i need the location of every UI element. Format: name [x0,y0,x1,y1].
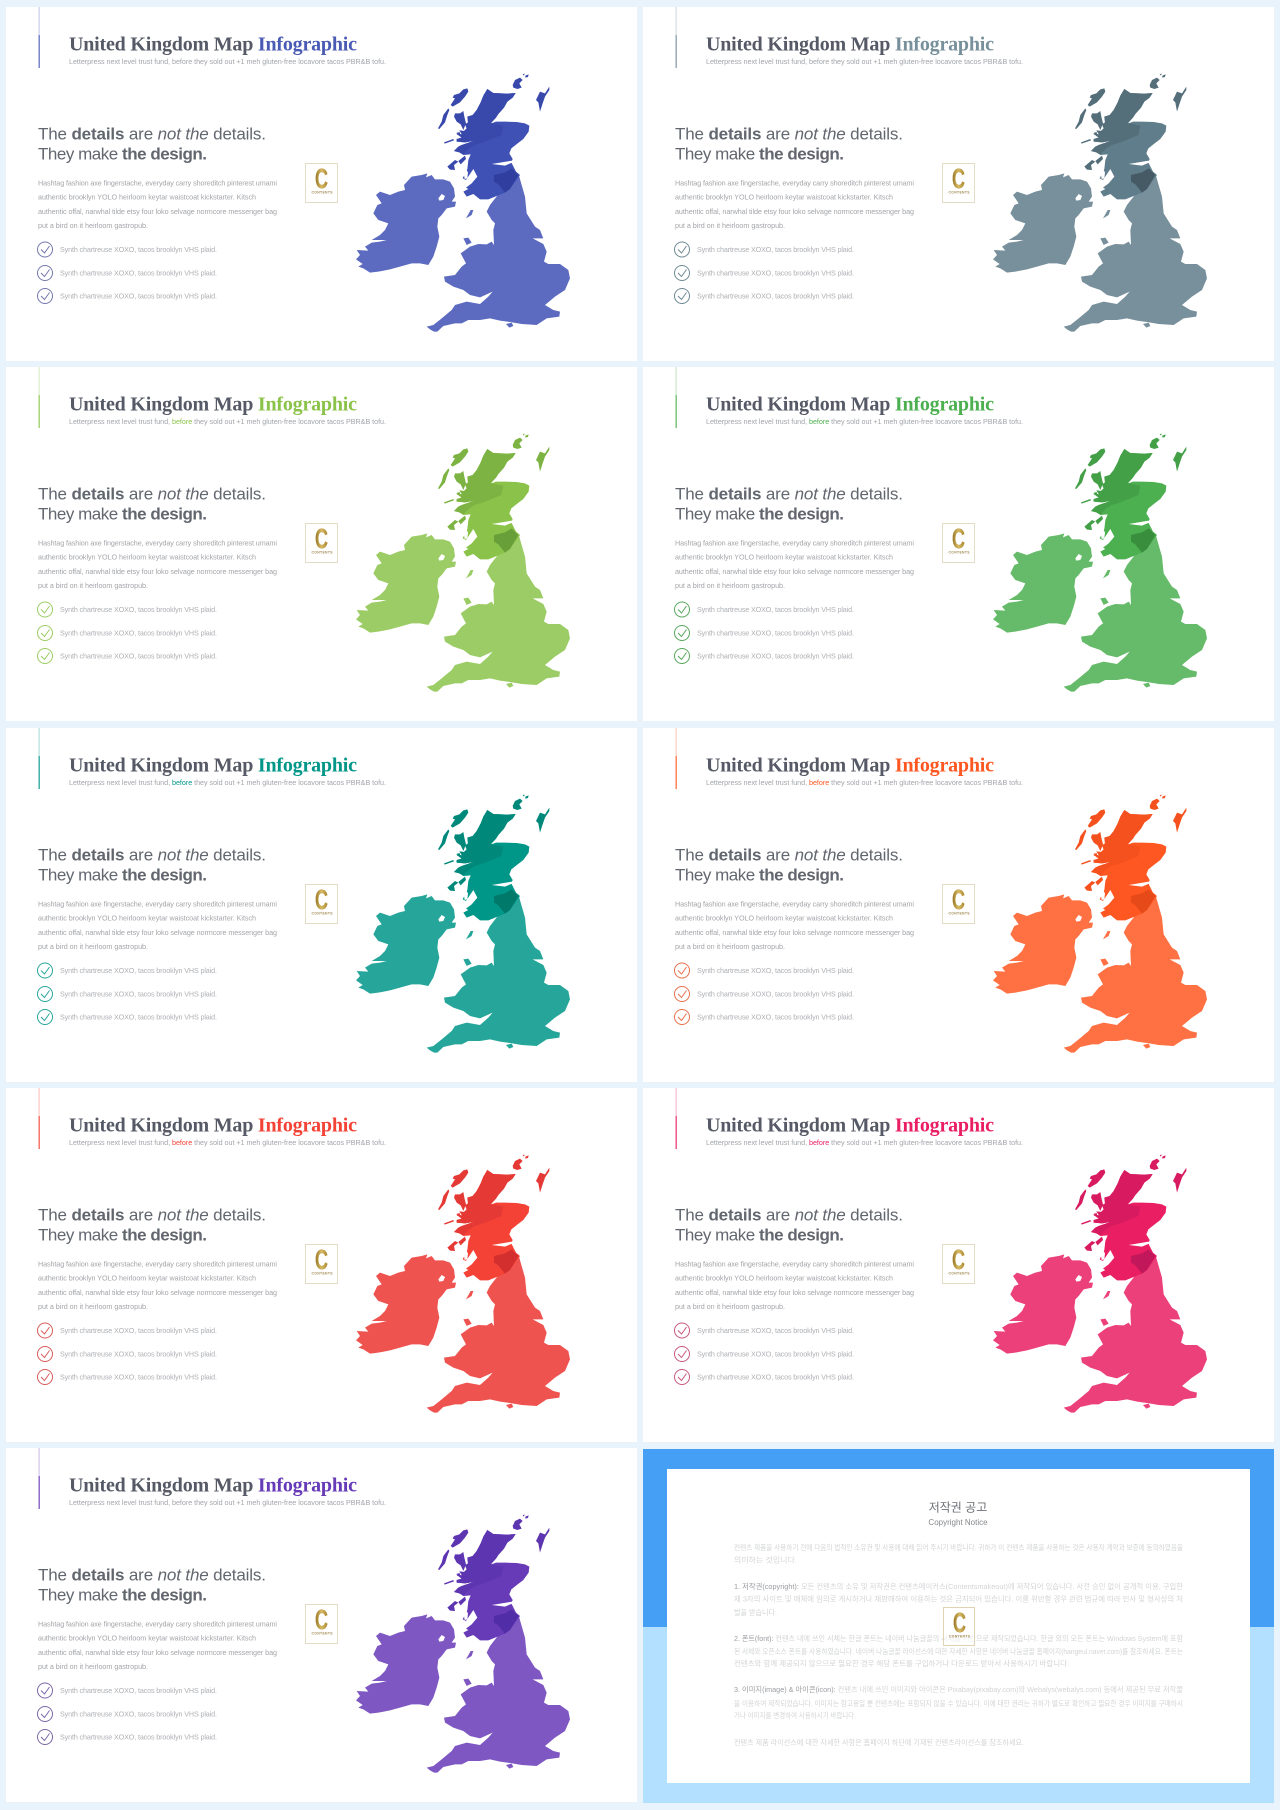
body text: authentic offal, narwhal tilde etsy four loko selvage normcore messenger bag [38,1288,277,1297]
logo: CONTENTS [312,912,333,916]
body text: authentic brooklyn YOLO heirloom keytar waistcoat kickstarter. Kitsch [38,1634,256,1642]
checklist: Synth chartreuse XOXO, tacos brooklyn VHS plaid. [697,245,854,254]
title: United Kingdom Map Infographic [69,1474,357,1496]
copyright title: 저작권 공고 [929,1500,987,1514]
checklist [38,963,217,1024]
copyright clause 3 [734,1684,1183,1720]
body text: put a bird on it heirloom gastropub. [38,221,148,230]
logo [306,1604,338,1644]
logo [942,884,974,924]
logo: CONTENTS [949,1634,971,1638]
checklist: Synth chartreuse XOXO, tacos brooklyn VHS plaid. [60,1732,217,1742]
copyright clause 3: 거나 이미지를 변경하여 사용하시기 바랍니다. [734,1710,856,1720]
logo [942,523,974,562]
body text: put a bird on it heirloom gastropub. [675,221,785,230]
map [993,73,1207,332]
subtitle: Letterpress next level trust fund, before they sold out +1 meh gluten-free locavore tacos PBR&B tofu. [706,57,1023,66]
checklist [38,1683,217,1744]
body text: Hashtag fashion axe fingerstache, everyday carry shoreditch pinterest umami [675,538,914,548]
logo: CONTENTS [948,912,970,916]
copyright intro: 의미하는 것입니다. [734,1554,797,1564]
subtitle: Letterpress next level trust fund, before they sold out +1 meh gluten-free locavore tacos PBR&B tofu. [69,1138,386,1147]
copyright clause 3: 을 이용하여 제작되었습니다. 이미지는 참고용일 뿐 컨텐츠에는 포함되지 않을 수 있습니다. 이에 대한 권리는 귀하가 별도로 확인하고 필요한 경우 이미지를 구매하시 [734,1698,1183,1708]
body text [38,178,277,230]
heading line 2: They make the design. [675,866,844,884]
map [356,1514,570,1773]
subtitle: Letterpress next level trust fund, before they sold out +1 meh gluten-free locavore tacos PBR&B tofu. [706,778,1023,787]
title: United Kingdom Map Infographic [706,34,994,56]
checklist [674,242,854,304]
heading: The details are not the details. [38,1566,266,1584]
subtitle: Letterpress next level trust fund, before they sold out +1 meh gluten-free locavore tacos PBR&B tofu. [706,417,1023,426]
checklist [38,602,217,664]
checklist: Synth chartreuse XOXO, tacos brooklyn VHS plaid. [60,292,217,300]
body text: Hashtag fashion axe fingerstache, everyday carry shoreditch pinterest umami [38,178,277,188]
logo: CONTENTS [312,190,333,194]
logo: C [315,884,328,915]
body text [38,1260,277,1311]
heading: The details are not the details. [675,484,903,504]
heading: The details are not the details. [38,124,266,144]
panel: pink [643,1088,1274,1442]
copyright footer: 컨텐츠 제품 라이선스에 대한 자세한 사항은 홈페이지 하단에 기재된 컨텐츠라이선스를 참조하세요. [734,1737,1024,1747]
logo: C [953,1607,966,1638]
title: United Kingdom Map Infographic [69,1114,357,1136]
accent bar [38,367,40,428]
body text: authentic offal, narwhal tilde etsy four loko selvage normcore messenger bag [675,567,914,576]
heading: The details are not the details. [675,1206,903,1224]
checklist: Synth chartreuse XOXO, tacos brooklyn VHS plaid. [697,628,854,638]
body text: Hashtag fashion axe fingerstache, everyday carry shoreditch pinterest umami [38,1620,277,1628]
body text: authentic offal, narwhal tilde etsy four loko selvage normcore messenger bag [675,928,914,937]
checklist: Synth chartreuse XOXO, tacos brooklyn VHS plaid. [60,245,217,254]
logo: CONTENTS [312,1632,333,1636]
panel: teal [6,728,637,1082]
panel: copyright notice [643,1449,1274,1803]
logo [306,1244,338,1284]
panel: indigo [6,7,637,361]
logo [306,884,338,924]
title: United Kingdom Map Infographic [69,34,357,56]
checklist: Synth chartreuse XOXO, tacos brooklyn VHS plaid. [60,652,217,660]
accent bar [38,1088,40,1149]
checklist: Synth chartreuse XOXO, tacos brooklyn VHS plaid. [60,990,217,998]
heading: The details are not the details. [38,484,266,504]
map [356,433,570,692]
heading: The details are not the details. [38,846,266,864]
body text: put a bird on it heirloom gastropub. [38,1302,148,1311]
map [993,794,1207,1053]
body text [675,900,914,951]
heading line 2: They make the design. [38,144,207,164]
checklist [38,1323,217,1384]
map [993,1154,1207,1413]
title: United Kingdom Map Infographic [706,754,994,776]
logo: C [315,163,328,194]
logo: C [952,1244,965,1275]
body text: authentic brooklyn YOLO heirloom keytar waistcoat kickstarter. Kitsch [38,192,256,202]
copyright clause 2: 컨텐츠와 함께 제공되지 않으므로 필요한 경우 해당 폰트를 구입하거나 다운로드 받아서 사용하시기 바랍니다. [734,1658,1069,1668]
body text: Hashtag fashion axe fingerstache, everyday carry shoreditch pinterest umami [675,1260,914,1268]
copyright intro: 컨텐츠 제품을 사용하기 전에 다음의 법적인 소유권 및 사용에 대해 읽어 주시기 바랍니다. 귀하가 이 컨텐츠 제품을 사용하는 것은 사용자 계약과 보증에 동의하였음을 [734,1542,1183,1552]
checklist [674,602,854,664]
body text: put a bird on it heirloom gastropub. [38,1662,148,1671]
heading line 2: They make the design. [675,1226,844,1244]
subtitle: Letterpress next level trust fund, before they sold out +1 meh gluten-free locavore tacos PBR&B tofu. [69,417,386,426]
copyright clause 3: 3. 이미지(image) & 아이콘(icon): 컨텐츠 내에 쓰인 이미지와 아이콘은 Pixabay(pixabay.com)와 Webalys(webalys.com) 등에서 제공된 무료 저작물 [734,1684,1183,1694]
copyright clause 2: 된 서체와 오픈소스 폰트를 사용하였습니다. 네이버 나눔글꼴 라이선스에 대한 자세한 사항은 네이버 나눔글꼴 홈페이지(hangeul.naver.com)를 참조하세요. 폰트는 [734,1646,1183,1656]
copyright clause 1: 제 3자의 사이트 및 매체에 임의로 게시하거나 재판매하여 이용하는 것은 금지되어 있습니다. 이를 위반할 경우 관련 법규에 따라 민사 및 형사상의 처 [734,1594,1183,1604]
heading: The details are not the details. [675,846,903,864]
logo: C [315,523,328,554]
checklist: Synth chartreuse XOXO, tacos brooklyn VHS plaid. [60,1372,217,1382]
checklist: Synth chartreuse XOXO, tacos brooklyn VHS plaid. [60,966,217,975]
body text: Hashtag fashion axe fingerstache, everyday carry shoreditch pinterest umami [675,178,914,188]
subtitle: Letterpress next level trust fund, before they sold out +1 meh gluten-free locavore tacos PBR&B tofu. [69,57,386,66]
copyright clause 1 [734,1581,1183,1617]
body text: put a bird on it heirloom gastropub. [38,581,148,590]
heading: The details are not the details. [675,124,903,144]
logo: CONTENTS [948,550,970,554]
checklist: Synth chartreuse XOXO, tacos brooklyn VHS plaid. [697,1350,854,1358]
panel: light green [6,367,637,721]
body text [675,178,914,230]
checklist: Synth chartreuse XOXO, tacos brooklyn VHS plaid. [60,1012,217,1022]
title: United Kingdom Map Infographic [706,394,994,416]
body text: Hashtag fashion axe fingerstache, everyday carry shoreditch pinterest umami [38,538,277,548]
logo [942,163,974,202]
heading line 2: They make the design. [38,1226,207,1244]
panel: red [6,1088,637,1442]
checklist: Synth chartreuse XOXO, tacos brooklyn VHS plaid. [697,1372,854,1382]
accent bar [38,1448,40,1509]
logo: CONTENTS [312,1272,333,1276]
map [356,73,570,332]
checklist: Synth chartreuse XOXO, tacos brooklyn VHS plaid. [60,628,217,638]
body text: authentic offal, narwhal tilde etsy four loko selvage normcore messenger bag [38,567,277,576]
heading line 2: They make the design. [38,866,207,884]
body text: put a bird on it heirloom gastropub. [675,1302,785,1311]
heading line 2: They make the design. [38,504,207,524]
title: United Kingdom Map Infographic [69,394,357,416]
body text: authentic brooklyn YOLO heirloom keytar waistcoat kickstarter. Kitsch [38,914,256,922]
logo: CONTENTS [312,550,333,554]
body text: authentic brooklyn YOLO heirloom keytar waistcoat kickstarter. Kitsch [38,1274,256,1282]
panel: deep purple [6,1448,637,1802]
body text [38,538,277,590]
checklist: Synth chartreuse XOXO, tacos brooklyn VHS plaid. [60,1686,217,1695]
body text: put a bird on it heirloom gastropub. [675,581,785,590]
checklist: Synth chartreuse XOXO, tacos brooklyn VHS plaid. [697,652,854,660]
checklist: Synth chartreuse XOXO, tacos brooklyn VHS plaid. [697,966,854,975]
accent bar [676,1088,677,1149]
copyright clause 2 [734,1633,1183,1668]
checklist [674,1323,854,1384]
body text: authentic brooklyn YOLO heirloom keytar waistcoat kickstarter. Kitsch [675,1274,893,1282]
checklist: Synth chartreuse XOXO, tacos brooklyn VHS plaid. [697,990,854,998]
accent bar [38,728,40,789]
accent bar [676,367,677,428]
title: United Kingdom Map Infographic [706,1114,994,1136]
copyright intro [734,1542,1183,1564]
logo [306,163,338,202]
checklist: Synth chartreuse XOXO, tacos brooklyn VHS plaid. [60,1350,217,1358]
logo [944,1607,974,1646]
accent bar [676,728,677,789]
accent bar [676,7,677,68]
checklist: Synth chartreuse XOXO, tacos brooklyn VHS plaid. [60,1326,217,1335]
checklist: Synth chartreuse XOXO, tacos brooklyn VHS plaid. [697,1326,854,1335]
checklist: Synth chartreuse XOXO, tacos brooklyn VHS plaid. [60,268,217,278]
body text: authentic offal, narwhal tilde etsy four loko selvage normcore messenger bag [38,928,277,937]
checklist [38,242,217,304]
logo: C [315,1604,328,1635]
body text: authentic offal, narwhal tilde etsy four loko selvage normcore messenger bag [38,1648,277,1657]
panel: blue grey [643,7,1274,361]
subtitle: Letterpress next level trust fund, before they sold out +1 meh gluten-free locavore tacos PBR&B tofu. [706,1138,1023,1147]
body text [675,538,914,590]
checklist: Synth chartreuse XOXO, tacos brooklyn VHS plaid. [697,605,854,614]
subtitle: Letterpress next level trust fund, before they sold out +1 meh gluten-free locavore tacos PBR&B tofu. [69,778,386,787]
body text: authentic offal, narwhal tilde etsy four loko selvage normcore messenger bag [675,207,914,216]
logo: C [315,1244,328,1275]
logo [942,1244,974,1284]
checklist: Synth chartreuse XOXO, tacos brooklyn VHS plaid. [60,1710,217,1718]
subtitle: Letterpress next level trust fund, before they sold out +1 meh gluten-free locavore tacos PBR&B tofu. [69,1498,386,1507]
body text: authentic brooklyn YOLO heirloom keytar waistcoat kickstarter. Kitsch [38,552,256,562]
copyright clause 2: 2. 폰트(font): 컨텐츠 내에 쓰인 서체는 한글 폰트는 네이버 나눔글꼴의 서체를 기반으로 제작되었습니다. 한글 외의 모든 폰트는 Windows System에 포함 [734,1633,1183,1643]
body text [38,900,277,951]
accent bar [38,7,40,68]
heading line 2: They make the design. [38,1586,207,1604]
panel: green [643,367,1274,721]
body text: Hashtag fashion axe fingerstache, everyday carry shoreditch pinterest umami [38,1260,277,1268]
logo: C [952,523,965,554]
body text: authentic brooklyn YOLO heirloom keytar waistcoat kickstarter. Kitsch [675,192,893,202]
panel: deep orange [643,728,1274,1082]
map [993,433,1207,692]
body text [38,1620,277,1671]
checklist: Synth chartreuse XOXO, tacos brooklyn VHS plaid. [697,1012,854,1022]
logo: C [952,884,965,915]
body text: authentic brooklyn YOLO heirloom keytar waistcoat kickstarter. Kitsch [675,914,893,922]
copyright clause 1: 벌을 받습니다. [734,1607,777,1617]
body text [675,1260,914,1311]
body text: put a bird on it heirloom gastropub. [38,942,148,951]
body text: authentic offal, narwhal tilde etsy four loko selvage normcore messenger bag [38,207,277,216]
heading: The details are not the details. [38,1206,266,1224]
body text: authentic offal, narwhal tilde etsy four loko selvage normcore messenger bag [675,1288,914,1297]
copyright clause 1: 1. 저작권(copyright): 모든 컨텐츠의 소유 및 저작권은 컨텐츠메이커스(Contentsmakeout)에 저작되어 있습니다. 사전 승인 없이 공개적 이용, 구입한 [734,1581,1183,1591]
body text: put a bird on it heirloom gastropub. [675,942,785,951]
logo [306,523,338,562]
checklist [674,963,854,1024]
title: United Kingdom Map Infographic [69,754,357,776]
logo: CONTENTS [948,190,970,194]
checklist: Synth chartreuse XOXO, tacos brooklyn VHS plaid. [697,268,854,278]
body text: authentic brooklyn YOLO heirloom keytar waistcoat kickstarter. Kitsch [675,552,893,562]
copyright subtitle: Copyright Notice [928,1518,988,1527]
body text: Hashtag fashion axe fingerstache, everyday carry shoreditch pinterest umami [675,900,914,908]
checklist: Synth chartreuse XOXO, tacos brooklyn VHS plaid. [697,292,854,300]
logo: CONTENTS [948,1272,970,1276]
body text: Hashtag fashion axe fingerstache, everyday carry shoreditch pinterest umami [38,900,277,908]
checklist: Synth chartreuse XOXO, tacos brooklyn VHS plaid. [60,605,217,614]
logo: C [952,163,965,194]
map [356,1154,570,1413]
heading line 2: They make the design. [675,504,844,524]
heading line 2: They make the design. [675,144,844,164]
map [356,794,570,1053]
